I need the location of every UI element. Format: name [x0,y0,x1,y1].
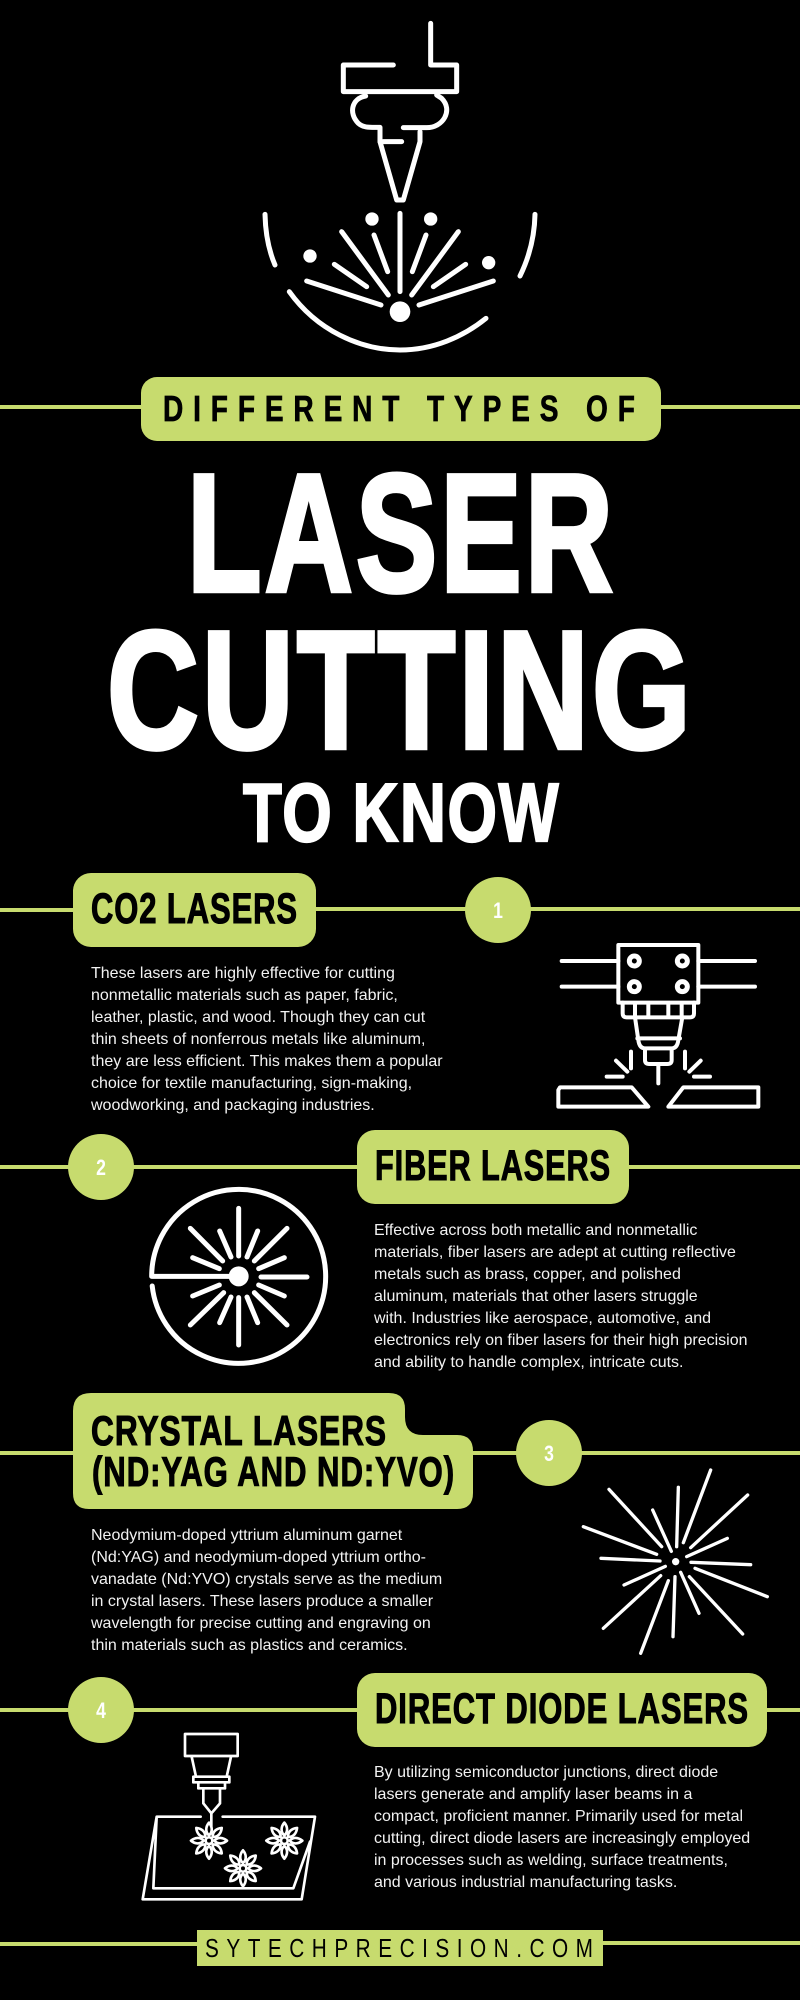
text: diode description [374,1764,750,1891]
heading: CO2 lasers [73,873,316,947]
text: CO2 description [90,965,443,1114]
text: diode description: By utilizing semiconductor junctions, direct diode [374,1764,718,1781]
panel: CO2 lasers [0,873,800,1114]
text: diode description: and various industrial manufacturing tasks. [374,1874,677,1891]
heading: crystal lasers: (ND:YAG AND ND:YVO) [92,1448,455,1495]
number badge 2 [68,1134,134,1200]
text: crystal description: (Nd:YAG) and neodymium-doped yttrium ortho- [91,1549,426,1566]
heading line decoration and title badge: DIFFERENT TYPES OF [163,389,635,429]
text: CO2 description: choice for textile manufacturing, sign-making, [91,1075,412,1092]
number badge 4: 4 [96,1699,106,1724]
title: LASER: LASER [187,439,616,627]
text: CO2 description: woodworking, and packaging industries. [90,1097,375,1114]
panel: direct diode lasers [0,1673,800,1899]
text: CO2 description: they are less efficient. This makes them a popular [91,1053,443,1070]
number badge 4 [68,1677,134,1743]
text: diode description: in processes such as welding, surface treatments, [374,1852,728,1869]
text: fiber description: aluminum, materials that other lasers struggle [374,1288,698,1305]
number badge 2: 2 [96,1156,106,1181]
heading: fiber lasers [357,1130,629,1204]
text: crystal description: in crystal lasers. These lasers produce a smaller [91,1593,434,1610]
number badge 1 [465,877,531,943]
text: diode description: lasers generate and amplify laser beams in a [374,1786,692,1803]
number badge 3 [516,1420,582,1486]
heading: fiber lasers: FIBER LASERS [375,1142,611,1190]
panel: fiber lasers [0,1130,800,1371]
text: fiber description: electronics rely on fiber lasers for their high precision [374,1332,748,1349]
text: crystal description: thin materials such as plastics and ceramics. [91,1637,408,1654]
text: fiber description: materials, fiber lasers are adept at cutting reflective [374,1244,736,1261]
heading: CO2 lasers: CO2 LASERS [91,885,298,933]
footer: website [0,1930,800,1966]
panel: crystal lasers [0,1393,800,1654]
text: diode description: compact, proficient manner. Primarily used for metal [374,1808,743,1825]
heading: direct diode lasers [357,1673,767,1747]
text: CO2 description: leather, plastic, and wood. Though they can cut [91,1009,426,1026]
heading: crystal lasers: CRYSTAL LASERS [91,1407,387,1454]
text: fiber description: with. Industries like aerospace, automotive, and [373,1310,711,1327]
icon: laser cutting flowers on sheet [143,1734,315,1899]
icon: fiber laser circle [152,1189,326,1363]
number badge 1: 1 [493,899,503,924]
text: CO2 description: nonmetallic materials such as paper, fabric, [91,987,398,1004]
text: fiber description [373,1222,748,1371]
text: crystal description: Neodymium-doped yttrium aluminum garnet [91,1527,403,1544]
icon: crystal starburst [583,1470,767,1653]
icon: CO2 laser machine [558,945,758,1107]
text: crystal description: vanadate (Nd:YVO) crystals serve as the medium [91,1571,442,1588]
text: fiber description: and ability to handle complex, intricate cuts. [374,1354,684,1371]
text: crystal description: wavelength for precise cutting and engraving on [90,1615,431,1632]
text: fiber description: metals such as brass, copper, and polished [374,1266,681,1283]
text: fiber description: Effective across both metallic and nonmetallic [374,1222,697,1239]
footer: website: SYTECHPRECISION.COM [205,1934,593,1963]
text: crystal description [90,1527,442,1654]
number badge 3: 3 [544,1442,554,1467]
text: diode description: cutting, direct diode lasers are increasingly employed [374,1830,750,1847]
text: CO2 description: These lasers are highly effective for cutting [91,965,395,982]
heading line decoration and title badge [0,377,800,441]
icon: laser cutting head with sparks [265,23,535,350]
text: CO2 description: thin sheets of nonferrous metals like aluminum, [91,1031,425,1048]
heading: crystal lasers [73,1393,473,1509]
title: TO KNOW: TO KNOW [243,766,560,859]
